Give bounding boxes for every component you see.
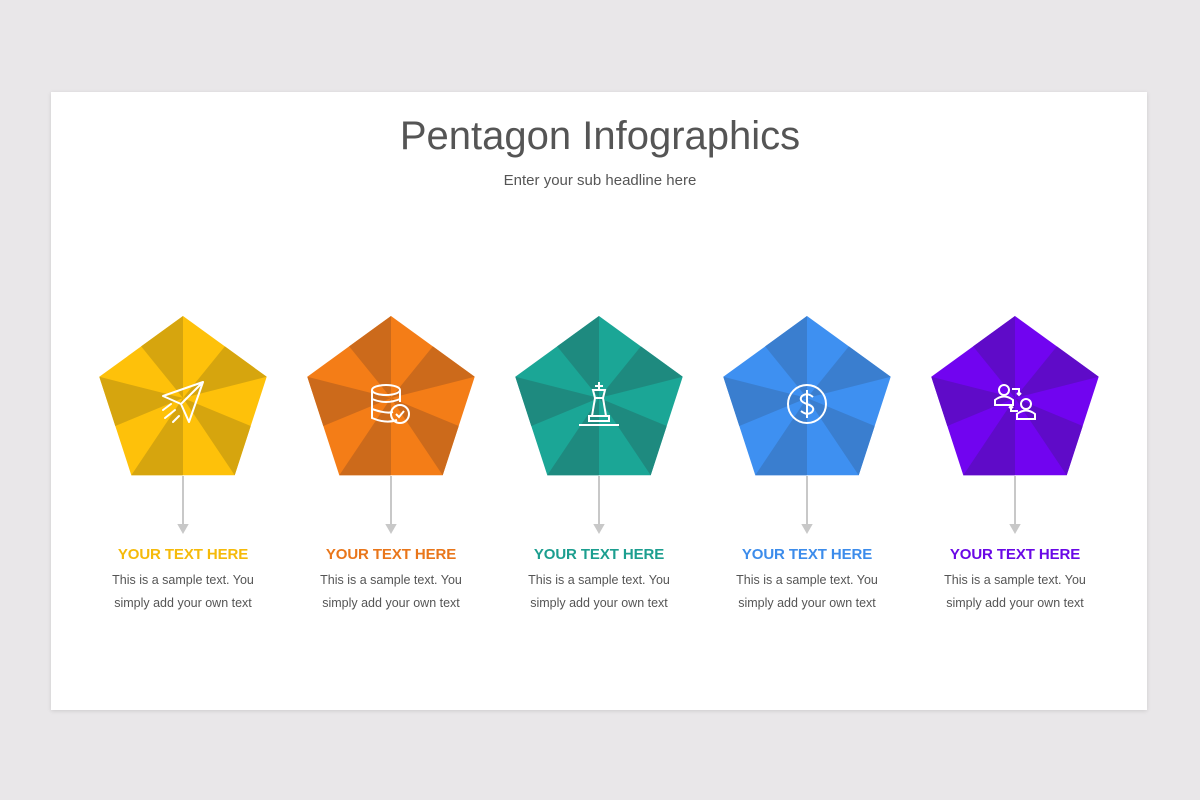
text block 5: YOUR TEXT HERE — [950, 546, 1080, 563]
text block 1 — [112, 546, 254, 610]
text block 4: This is a sample text. You — [736, 573, 878, 587]
card background — [51, 92, 1147, 710]
pentagon 1: yellow — [99, 316, 267, 475]
text block 1: YOUR TEXT HERE — [118, 546, 248, 563]
pentagon 2: orange — [307, 316, 475, 475]
text block 5: This is a sample text. You — [944, 573, 1086, 587]
icon: people exchange — [995, 385, 1035, 419]
text block 4: YOUR TEXT HERE — [742, 546, 872, 563]
text block 1: simply add your own text — [114, 596, 252, 610]
text block 5 — [944, 546, 1086, 610]
text block 2: This is a sample text. You — [320, 573, 462, 587]
pentagon 3: teal — [515, 316, 683, 475]
pentagon 5: purple — [931, 316, 1099, 475]
text block 4 — [736, 546, 878, 610]
text block 2: YOUR TEXT HERE — [326, 546, 456, 563]
text block 2: simply add your own text — [322, 596, 460, 610]
text block 3 — [528, 546, 670, 610]
title: Pentagon Infographics — [400, 114, 800, 158]
icon: dollar coin — [788, 385, 826, 423]
pentagon 4: blue — [723, 316, 891, 475]
subtitle: Enter your sub headline here — [504, 172, 696, 189]
icon: paper plane — [163, 382, 203, 422]
text block 4: simply add your own text — [738, 596, 876, 610]
text block 5: simply add your own text — [946, 596, 1084, 610]
text block 2 — [320, 546, 462, 610]
icon: database check — [372, 385, 409, 423]
text block 3: This is a sample text. You — [528, 573, 670, 587]
text block 1: This is a sample text. You — [112, 573, 254, 587]
arrows — [179, 476, 1019, 532]
text block 3: simply add your own text — [530, 596, 668, 610]
text block 3: YOUR TEXT HERE — [534, 546, 664, 563]
icon: chess king — [579, 382, 619, 425]
